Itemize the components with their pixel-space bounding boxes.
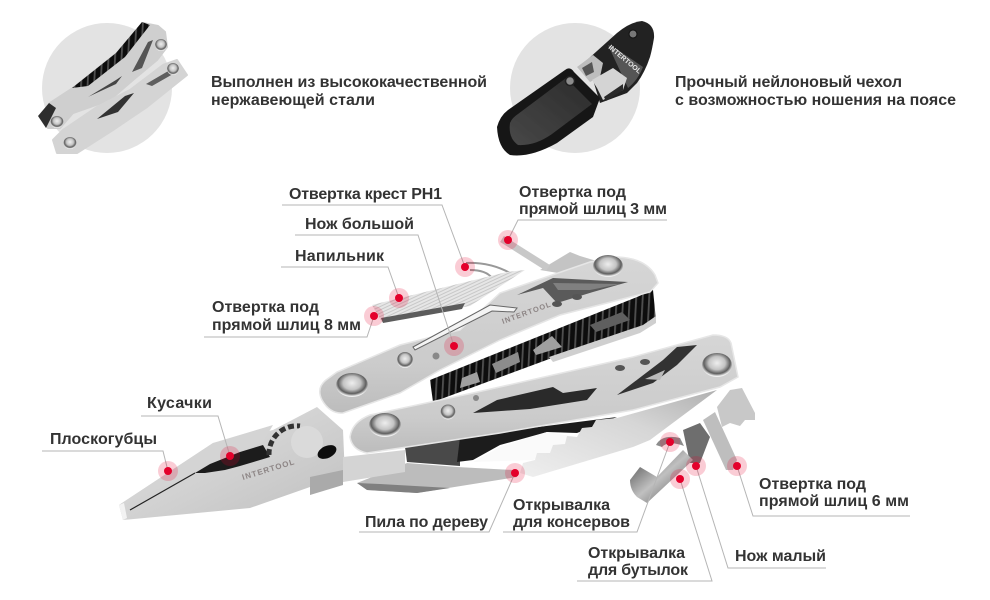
- text: nylon pouch: [675, 74, 956, 109]
- callout: Открывалка для консервов: для консервов: [513, 514, 630, 531]
- saw blade and lower frame: [343, 390, 717, 493]
- upper handle with grooved spine: [320, 255, 658, 413]
- upper handle with grooved spine: INTERTOOL: [501, 300, 553, 326]
- callout: Кусачки: [141, 395, 240, 466]
- pliers head: [119, 407, 345, 520]
- callout: Открывалка для бутылок: для бутылок: [588, 562, 689, 579]
- callout: Отвертка под прямой шлиц 6 мм: Отвертка под: [759, 476, 866, 493]
- lower handle: [350, 335, 738, 453]
- callout: Отвертка крест PH1: Отвертка крест PH1: [289, 186, 442, 203]
- callout: Пила по дереву: Пила по дереву: [365, 514, 488, 531]
- feature: nylon pouch: [497, 21, 956, 156]
- text: stainless steel: нержавеющей стали: [211, 92, 375, 109]
- callout: Открывалка для консервов: Открывалка: [513, 497, 610, 514]
- callout: Отвертка под прямой шлиц 8 мм: Отвертка под: [212, 299, 319, 316]
- image: closed multitool: [38, 22, 187, 153]
- text: stainless steel: [211, 74, 487, 109]
- image: black belt pouch: [497, 21, 654, 156]
- callout: Напильник: Напильник: [295, 248, 385, 265]
- small fold-out tools: [630, 388, 755, 503]
- callout: Плоскогубцы: Плоскогубцы: [50, 431, 157, 448]
- grey circle behind pouch: [510, 23, 640, 153]
- callout: Пила по дереву: [359, 463, 525, 532]
- callout: Открывалка для консервов: [503, 432, 680, 532]
- callout: Плоскогубцы: [42, 431, 178, 481]
- callout: Отвертка под прямой шлиц 8 мм: прямой шлиц 8 мм: [212, 317, 361, 334]
- grey circle behind small tool: [42, 23, 172, 153]
- callout: Напильник: [281, 248, 409, 308]
- callout: Открывалка для бутылок: [577, 469, 712, 581]
- callout: Открывалка для бутылок: Открывалка: [588, 545, 685, 562]
- back tools: [372, 239, 600, 323]
- callout: Отвертка под прямой шлиц 6 мм: прямой шлиц 6 мм: [759, 493, 909, 510]
- text: nylon pouch: с возможностью ношения на поясе: [675, 92, 956, 109]
- text: nylon pouch: Прочный нейлоновый чехол: [675, 74, 902, 91]
- callout: Нож большой: Нож большой: [305, 216, 414, 233]
- pliers head: INTERTOOL: [241, 457, 296, 482]
- callout: Отвертка под прямой шлиц 8 мм: [204, 299, 384, 337]
- callout: Отвертка под прямой шлиц 3 мм: прямой шлиц 3 мм: [519, 201, 667, 218]
- callout: Кусачки: Кусачки: [147, 395, 212, 412]
- callout: Отвертка под прямой шлиц 3 мм: [498, 184, 667, 250]
- callout: Нож малый: [686, 456, 826, 568]
- callout: Отвертка под прямой шлиц 3 мм: Отвертка под: [519, 184, 626, 201]
- multitool main image: [119, 239, 755, 520]
- image: black belt pouch: INTERTOOL: [607, 44, 643, 76]
- feature: stainless steel: [38, 22, 487, 153]
- callout: Нож малый: Нож малый: [735, 548, 826, 565]
- callout: Отвертка под прямой шлиц 6 мм: [727, 456, 910, 516]
- callout: Нож большой: [295, 216, 464, 356]
- callout: Отвертка крест PH1: [282, 186, 475, 277]
- text: stainless steel: Выполнен из высококачественной: [211, 74, 487, 91]
